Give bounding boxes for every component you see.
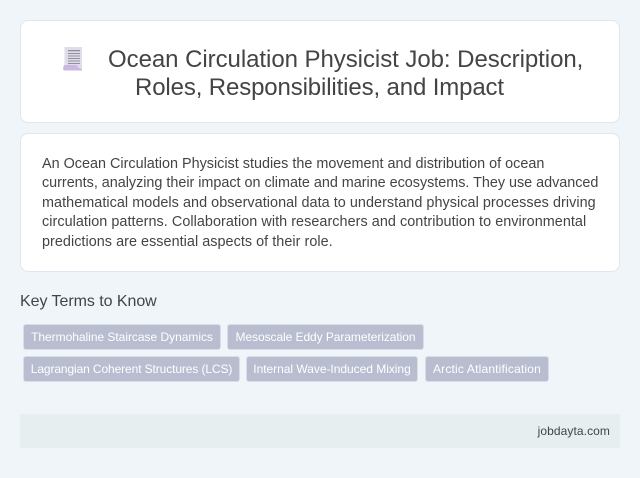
title: Ocean Circulation Physicist Job: Description,: [108, 46, 583, 73]
tag: [246, 356, 418, 382]
tag: [23, 356, 240, 382]
footer source: jobdayta.com: [538, 424, 610, 438]
description text: circulation patterns. Collaboration with researchers and contribution to environmental: [42, 214, 586, 230]
description text: currents, analyzing their impact on climate and marine ecosystems. They use advanced: [42, 175, 598, 191]
header panel: [20, 20, 620, 123]
description text: An Ocean Circulation Physicist studies the movement and distribution of ocean: [42, 156, 544, 172]
icon: paper scroll: [63, 47, 82, 70]
title: Roles, Responsibilities, and Impact: [135, 74, 504, 101]
heading: key terms: Key Terms to Know: [20, 293, 157, 310]
description text: predictions are essential aspects of their role.: [42, 234, 333, 250]
title: [108, 46, 583, 101]
tag: [425, 356, 549, 382]
description text: mathematical models and observational data to understand physical processes driving: [42, 195, 596, 211]
description panel: [20, 133, 620, 272]
tag: Mesoscale Eddy Parameterization: [236, 330, 415, 344]
tag list: [23, 324, 549, 382]
tag: Lagrangian Coherent Structures (LCS): [31, 362, 232, 376]
tag: Thermohaline Staircase Dynamics: [31, 330, 213, 344]
description text: [42, 156, 598, 250]
tag: [23, 324, 221, 350]
tag: Arctic Atlantification: [433, 362, 541, 376]
tag: Internal Wave-Induced Mixing: [253, 362, 411, 376]
tag: [227, 324, 424, 350]
footer bar: [20, 414, 620, 448]
